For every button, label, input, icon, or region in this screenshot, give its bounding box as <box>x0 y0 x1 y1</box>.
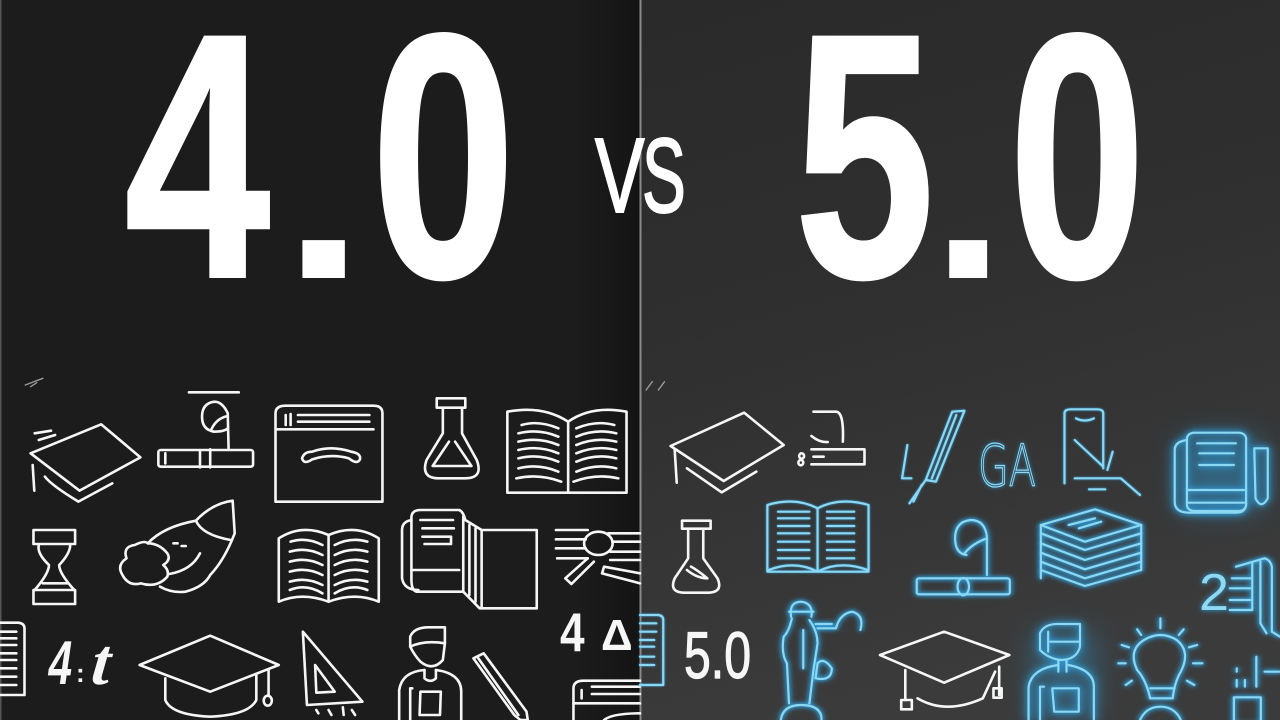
panel: glowing blue icons <box>781 509 1280 720</box>
icon: stacked papers <box>1041 509 1141 586</box>
icon: graduation cap large <box>140 636 279 717</box>
label: 5.0: 5.0 <box>684 618 751 692</box>
mark: small scribble top left <box>646 382 664 390</box>
icon: graduation cap white <box>880 632 1009 709</box>
glow halo behind person <box>1032 630 1098 720</box>
label: 4 delta: 4 <box>560 602 585 663</box>
icon: mortarboard top left <box>31 424 140 502</box>
heading: 4.0 <box>124 0 516 351</box>
centre divider line <box>640 0 642 720</box>
left edge line <box>0 0 2 720</box>
label: 4 delta <box>560 602 633 663</box>
label: 4:t handwritten: : <box>76 658 85 688</box>
icon: notebook and pen <box>1175 433 1268 513</box>
heading: vs <box>595 116 686 235</box>
label: 4:t handwritten: t <box>88 626 117 699</box>
icon: document on left edge <box>0 623 24 695</box>
icon: phone stylus <box>1064 409 1140 495</box>
icon: document left edge blue <box>640 615 663 685</box>
icon: mortarboard white <box>671 413 784 492</box>
icon: hourglass <box>33 530 75 604</box>
panel: right blue icons <box>640 409 1140 685</box>
heading: vs: V <box>595 117 644 235</box>
panel: right grey background <box>640 0 1280 720</box>
icon: medal with ribbons <box>556 530 640 584</box>
heading: 5.0 <box>794 0 1145 351</box>
heading: vs: S <box>642 116 686 235</box>
icon: open book centre <box>279 530 379 602</box>
panel: right white icons <box>646 382 1009 709</box>
icon: set square <box>303 632 362 715</box>
icon: open book blue <box>767 502 869 572</box>
icon: browser window <box>276 406 382 502</box>
panel: left icon grid <box>0 378 640 720</box>
label: 2: 2 <box>1199 564 1229 622</box>
heading: 5.0: . <box>931 49 1006 332</box>
icon: flask white <box>673 521 719 593</box>
icon: lightbulb <box>1118 618 1202 720</box>
label: 4 delta: Δ <box>601 611 633 660</box>
icon: pencil <box>473 653 528 720</box>
panel: left dark background <box>0 0 640 720</box>
icon: cloud and leaf <box>120 501 235 592</box>
icon: scroll blue <box>917 520 1010 595</box>
label: 4:t handwritten <box>44 626 117 699</box>
icon: pen <box>902 411 964 503</box>
icon: open book top right <box>507 410 627 493</box>
label: GA: GA <box>978 432 1036 500</box>
icon: stacked books and folder <box>402 510 537 608</box>
icon: flask <box>425 398 479 478</box>
panel: strongly glowing icons <box>1029 433 1268 720</box>
icon: person blue <box>1029 624 1094 720</box>
mark: small scribble top left <box>25 378 43 387</box>
icon: scroll white <box>798 412 864 465</box>
icon: tools bottom right <box>1234 657 1280 720</box>
icon: numbered notebook right <box>1230 558 1280 637</box>
label: 4:t handwritten: 4 <box>44 629 77 698</box>
icon: figure with curved arm <box>781 602 861 720</box>
heading: 4.0: . <box>282 49 366 333</box>
icon: browser window bottom right <box>573 681 640 720</box>
glow halo behind notebook <box>1180 436 1262 512</box>
icon: person <box>399 627 461 720</box>
icon: diploma scroll with ribbon <box>158 392 253 467</box>
